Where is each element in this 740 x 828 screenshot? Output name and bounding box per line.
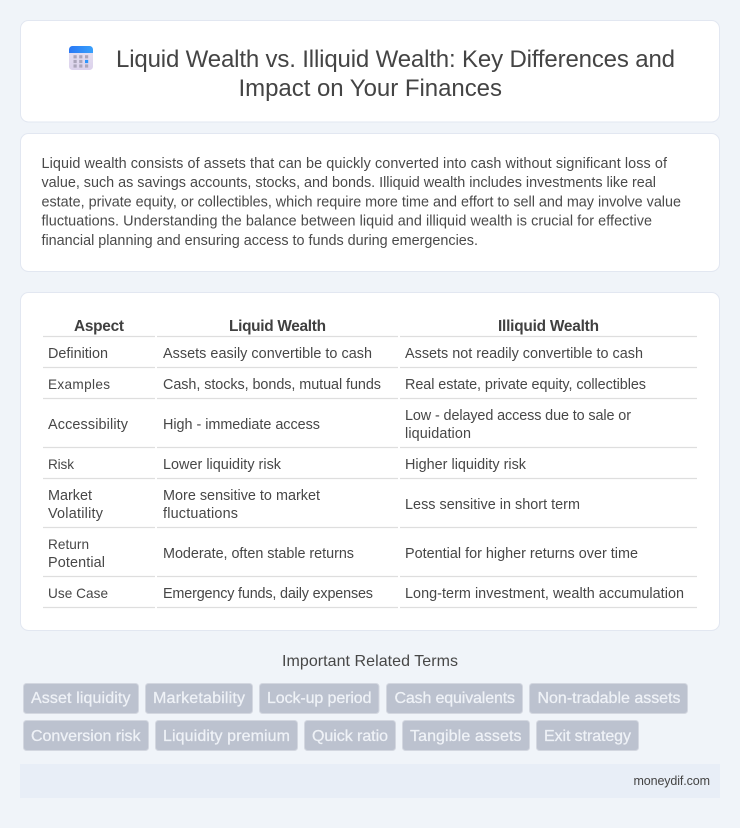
row: examples: Examples	[48, 377, 110, 392]
intro paragraph: value, such as savings accounts, stocks, and bonds. Illiquid wealth includes investments like real	[42, 175, 656, 191]
heading: important related terms: Important Related Terms	[282, 653, 458, 670]
panel: comparison table	[20, 292, 720, 630]
row: accessibility: liquidation	[405, 426, 471, 442]
row: risk: Higher liquidity risk	[405, 457, 527, 473]
intro paragraph: Liquid wealth consists of assets that can be quickly converted into cash without significant loss of	[42, 156, 668, 172]
row: market volatility: fluctuations	[163, 506, 238, 522]
row: definition: Assets easily convertible to cash	[163, 346, 372, 362]
footer bar	[20, 764, 720, 798]
row: accessibility	[48, 408, 631, 442]
tag: lock-up period	[260, 684, 379, 714]
title: Impact on Your Finances	[238, 75, 502, 102]
row: definition: Definition	[48, 346, 108, 362]
tag: marketability: Marketability	[153, 690, 245, 707]
tag: conversion risk	[24, 720, 148, 750]
row: use case: Use Case	[48, 586, 108, 601]
tag: marketability	[146, 684, 252, 714]
row: use case: Long-term investment, wealth accumulation	[405, 586, 684, 602]
row: use case: Emergency funds, daily expenses	[163, 586, 373, 602]
tag: asset liquidity	[24, 684, 138, 714]
intro paragraph: financial planning and ensuring access to funds during emergencies.	[42, 233, 478, 249]
table header: Aspect	[74, 318, 124, 335]
tag: asset liquidity: Asset liquidity	[31, 690, 130, 707]
row: accessibility: High - immediate access	[163, 417, 320, 433]
row: definition	[48, 346, 643, 362]
row: examples	[48, 377, 646, 393]
tag: quick ratio	[304, 720, 396, 750]
tag: cash equivalents	[386, 684, 522, 714]
tag: liquidity premium	[156, 720, 298, 750]
row: definition: Assets not readily convertible to cash	[405, 346, 643, 362]
intro paragraph: estate, private equity, or collectibles, which require more time and effort to sell and may involve value	[42, 194, 681, 210]
row: return potential: Moderate, often stable returns	[163, 546, 354, 562]
row: examples: Real estate, private equity, collectibles	[405, 377, 646, 393]
row: market volatility	[48, 488, 580, 522]
panel: introduction	[20, 134, 720, 272]
tag: exit strategy: Exit strategy	[544, 728, 631, 745]
row: return potential	[48, 537, 638, 571]
tag: tangible assets: Tangible assets	[410, 728, 522, 745]
table header	[74, 318, 599, 335]
tag: exit strategy	[536, 720, 638, 750]
row: examples: Cash, stocks, bonds, mutual funds	[163, 377, 381, 393]
row: return potential: Potential	[48, 555, 105, 571]
title	[116, 46, 675, 102]
icon: calendar	[69, 46, 93, 70]
intro paragraph	[42, 156, 681, 249]
intro paragraph: fluctuations. Understanding the balance between liquid and illiquid wealth is crucial for effective	[42, 214, 652, 230]
tag: quick ratio: Quick ratio	[312, 728, 388, 745]
row: market volatility: More sensitive to market	[163, 488, 320, 504]
tag: non-tradable assets	[530, 684, 688, 714]
row: market volatility: Volatility	[48, 506, 104, 522]
row: return potential: Return	[48, 537, 89, 552]
row: return potential: Potential for higher returns over time	[405, 546, 638, 562]
row: accessibility: Accessibility	[48, 417, 129, 433]
title: Liquid Wealth vs. Illiquid Wealth: Key Differences and	[116, 46, 675, 73]
row: risk: Risk	[48, 457, 74, 472]
row: risk	[48, 457, 527, 473]
tag: cash equivalents: Cash equivalents	[394, 690, 515, 707]
tag: liquidity premium: Liquidity premium	[163, 728, 290, 745]
table header: Liquid Wealth	[229, 318, 326, 335]
tag: conversion risk: Conversion risk	[31, 728, 142, 745]
row: use case	[48, 586, 684, 602]
panel: title header	[20, 20, 720, 122]
row: risk: Lower liquidity risk	[163, 457, 282, 473]
footer source: moneydif.com	[634, 774, 710, 788]
row: market volatility: Less sensitive in short term	[405, 497, 580, 513]
row: accessibility: Low - delayed access due to sale or	[405, 408, 631, 424]
row: market volatility: Market	[48, 488, 92, 504]
table header: Illiquid Wealth	[498, 318, 599, 335]
tag: tangible assets	[402, 720, 530, 750]
related term tags	[24, 684, 688, 750]
tag: non-tradable assets: Non-tradable assets	[538, 690, 680, 707]
tag: lock-up period: Lock-up period	[267, 690, 372, 707]
